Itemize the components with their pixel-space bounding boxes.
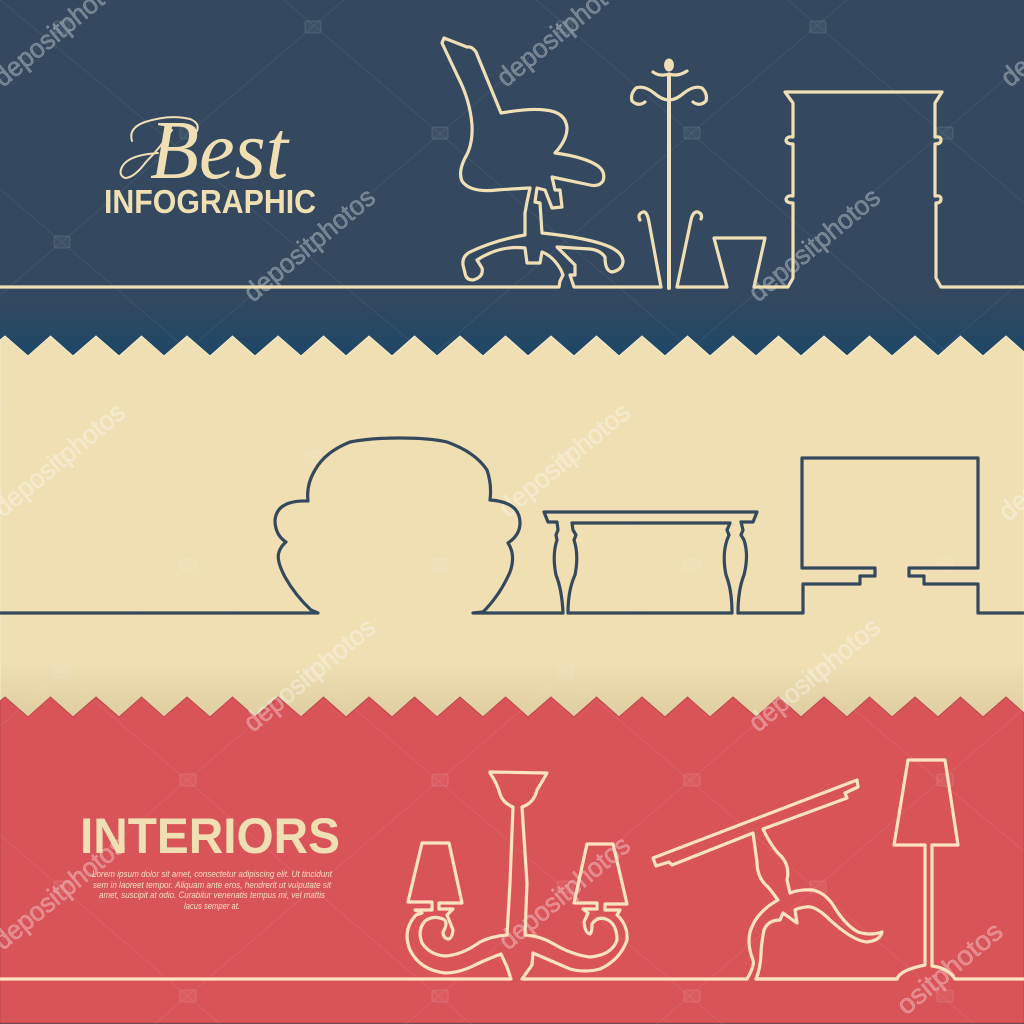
title: Best script: Best bbox=[150, 104, 291, 197]
text block: lorem ipsum: amet, suscipit at odio. Curabitur venenatis tempus mi, vel mattis bbox=[99, 890, 325, 900]
line art: office chair on ground line bbox=[0, 38, 661, 287]
watermark: depositphotos: depositphotos bbox=[743, 182, 886, 308]
panel: cream living room band bbox=[0, 336, 1024, 725]
watermark: depositphotos: depositphotos bbox=[493, 397, 636, 523]
decorative swash of the script B bbox=[121, 117, 198, 178]
panel: red lighting band bbox=[0, 697, 1024, 1023]
line art: chandelier bbox=[0, 772, 747, 979]
heading: INTERIORS: INTERIORS bbox=[80, 808, 340, 864]
watermark: depositphotos: depositphotos bbox=[238, 612, 381, 738]
line art: floor lamp bbox=[756, 760, 1024, 979]
text block: lorem ipsum: lacus semper at. bbox=[184, 901, 240, 911]
line art: armchair bbox=[0, 438, 563, 613]
watermark: depositphotos: depositphotos bbox=[493, 830, 636, 956]
panel: navy office band bbox=[0, 0, 1024, 360]
watermark: depositphotos: ositphotos bbox=[891, 916, 1008, 1021]
line art: coat stand and umbrellas bbox=[632, 58, 706, 288]
watermark: depositphotos: depositphotos bbox=[238, 182, 381, 308]
line art: television on stand bbox=[738, 458, 1024, 613]
line art: waste basket and cabinet bbox=[677, 92, 1024, 287]
line art: tilted table bbox=[653, 780, 897, 979]
watermark: depositphotos: depositphotos bbox=[743, 612, 886, 738]
text block: lorem ipsum: sem in laoreet tempor. Aliquam ante eros, hendrerit ut vulputate sit bbox=[93, 880, 331, 890]
line art: coffee table bbox=[544, 512, 757, 613]
text block: lorem ipsum: Lorem ipsum dolor sit amet, consectetur adipiscing elit. Ut tincidunt bbox=[92, 869, 332, 879]
text block: lorem ipsum bbox=[92, 869, 332, 911]
title: INFOGRAPHIC: INFOGRAPHIC bbox=[104, 183, 316, 220]
